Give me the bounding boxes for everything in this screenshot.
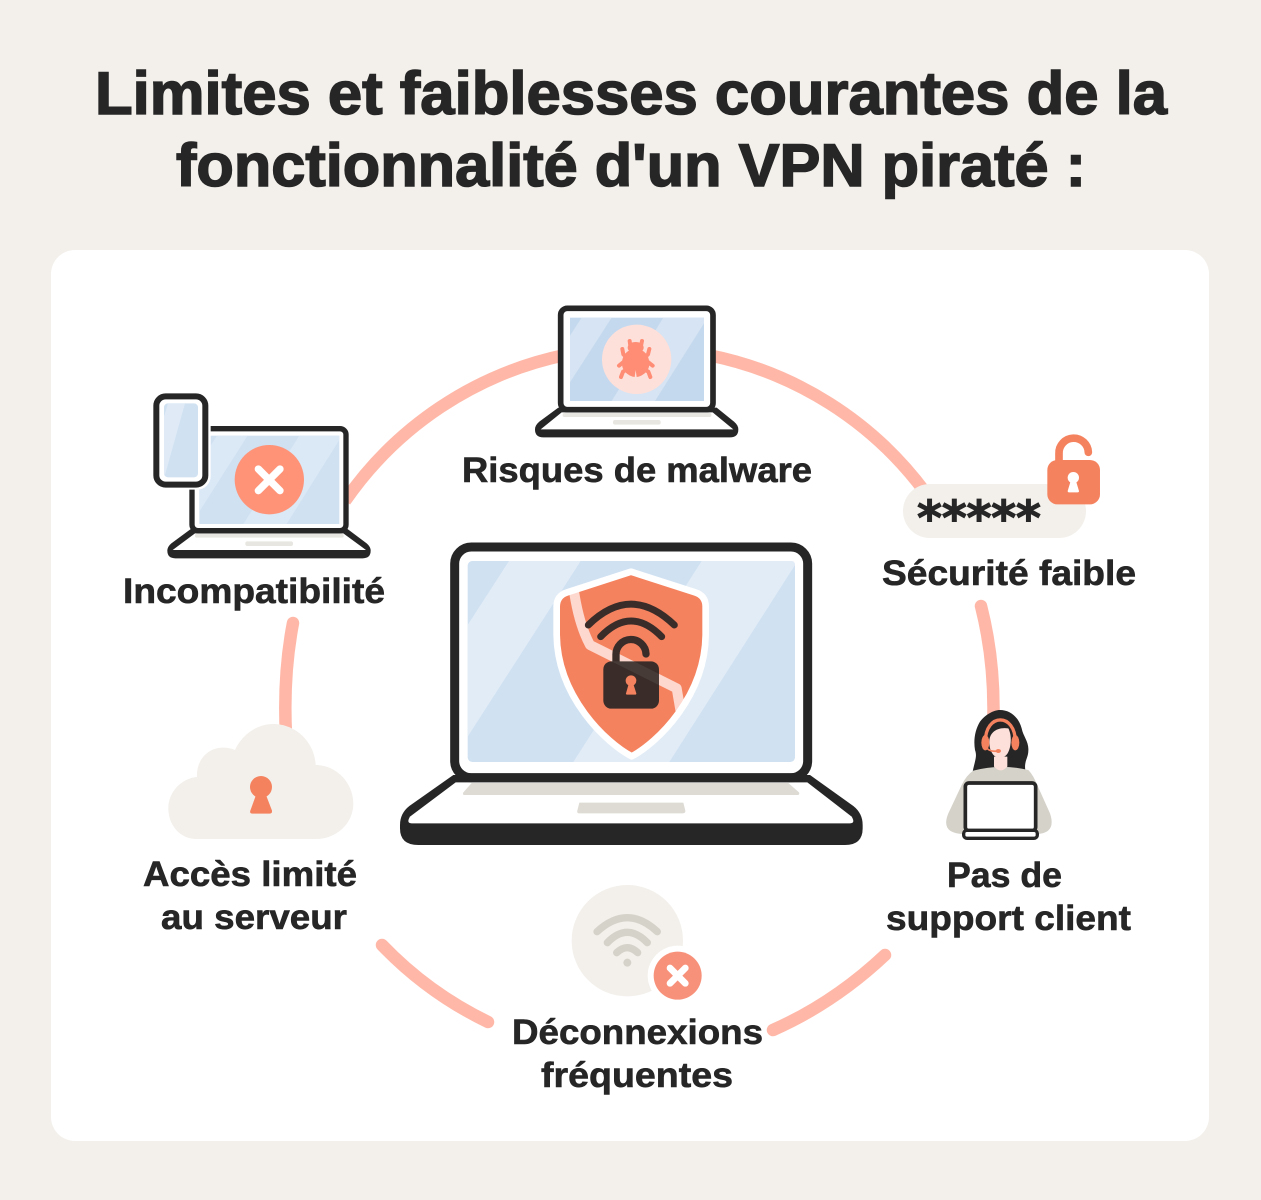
trackpad [613, 420, 661, 425]
laptop base [535, 408, 738, 437]
face [989, 728, 1011, 758]
body [946, 767, 1052, 840]
title: fonctionnalité d'un VPN piraté : [176, 132, 1086, 199]
icon: laptop with malware bug [535, 308, 738, 437]
bug badge [602, 325, 671, 394]
icon: support agent with headset [946, 710, 1052, 840]
laptop lid [561, 308, 713, 410]
label: Accès limité au serveur: au serveur [161, 898, 347, 937]
laptop lid [192, 429, 346, 531]
open padlock [1047, 438, 1100, 504]
label: Déconnexions fréquentes: fréquentes [541, 1056, 733, 1095]
screen glare [570, 318, 704, 401]
label: Accès limité au serveur: Accès limité [143, 855, 357, 894]
laptop deck [541, 412, 733, 429]
ring of connecting arcs [285, 355, 994, 1030]
laptop lid [455, 547, 808, 778]
shield [557, 572, 706, 756]
screen [468, 561, 795, 762]
laptop [964, 783, 1037, 838]
icon: cloud with keyhole [168, 724, 353, 839]
wifi waves [597, 918, 657, 953]
phone [151, 391, 211, 490]
wifi dot [623, 959, 631, 967]
error badge [235, 445, 304, 514]
title: Limites et faiblesses courantes de la [95, 60, 1168, 127]
password pill [903, 484, 1086, 538]
icon: wifi disconnected [572, 885, 708, 1006]
screen [570, 318, 704, 401]
headset [981, 720, 1019, 753]
laptop deck [408, 782, 853, 823]
trackpad [245, 541, 293, 546]
label: Pas de support client [886, 856, 1131, 938]
keyhole [250, 776, 272, 814]
keyboard area [463, 783, 799, 795]
wifi circle [572, 885, 683, 996]
label: Accès limité au serveur [143, 855, 357, 937]
laptop base [167, 528, 371, 558]
laptop deck [173, 533, 366, 550]
hair [973, 710, 1028, 772]
neck [994, 757, 1007, 770]
laptop base [400, 775, 863, 845]
shield crack [573, 587, 683, 723]
trackpad [577, 803, 685, 813]
label: Déconnexions fréquentes: Déconnexions [512, 1013, 763, 1052]
label: Pas de support client: Pas de [947, 856, 1062, 895]
icon: weak password field with open lock [903, 438, 1100, 547]
screen [199, 436, 339, 524]
label: Incompatibilité: Incompatibilité [123, 572, 385, 611]
shield outline [557, 572, 706, 756]
screen glare [199, 436, 339, 524]
panel: white card [51, 250, 1209, 1141]
error badge [648, 946, 708, 1006]
wifi waves [588, 604, 674, 637]
label: Risques de malware: Risques de malware [462, 451, 812, 490]
screen glare [468, 561, 795, 762]
title [95, 60, 1168, 199]
cloud [168, 724, 353, 839]
password asterisks: ***** [917, 491, 1041, 547]
keyboard [563, 413, 711, 417]
keyboard [195, 534, 344, 538]
label: Déconnexions fréquentes [512, 1013, 763, 1095]
icon: laptop and phone incompatibility [151, 391, 371, 558]
label: Pas de support client: support client [886, 899, 1131, 938]
open padlock [603, 636, 659, 709]
central laptop with VPN shield [400, 547, 863, 845]
label: Sécurité faible: Sécurité faible [882, 554, 1136, 593]
